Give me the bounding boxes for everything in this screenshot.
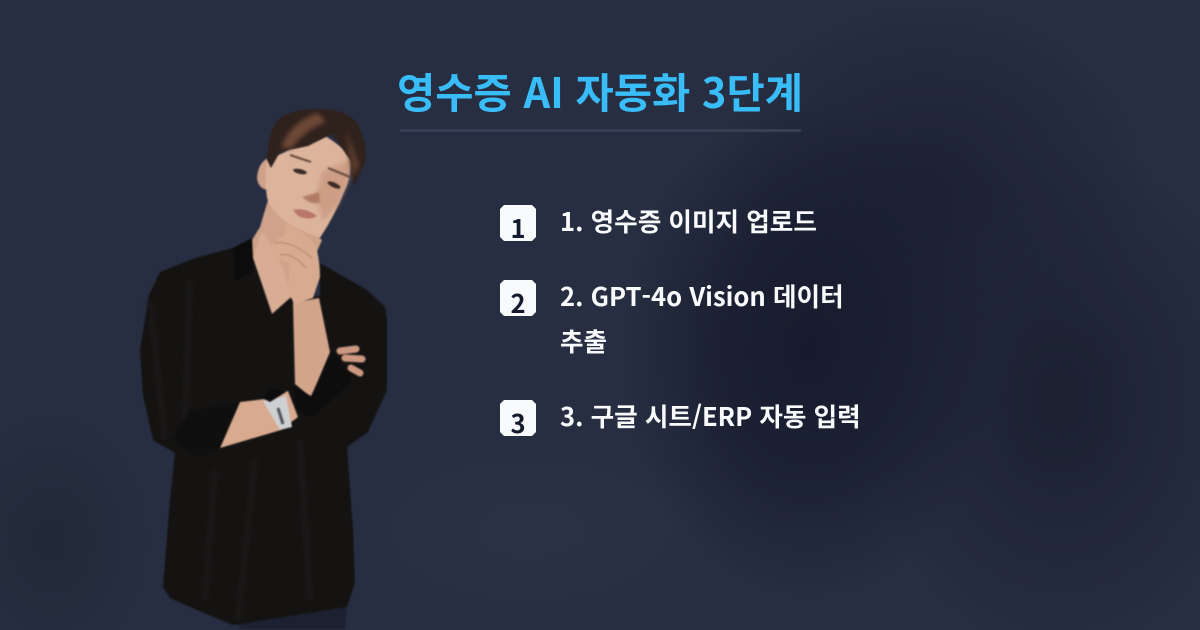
step 2 text: 추출 xyxy=(560,322,607,359)
sleeve cuff xyxy=(306,385,316,398)
hair xyxy=(267,109,366,186)
step 1 text: 1. 영수증 이미지 업로드 xyxy=(560,202,817,239)
collar xyxy=(251,240,252,244)
neck and chest xyxy=(252,200,322,314)
step 3 badge xyxy=(500,400,536,436)
ear xyxy=(257,158,268,190)
face xyxy=(266,133,350,238)
hand on chin xyxy=(270,223,320,304)
step 1 badge: 1 xyxy=(510,209,526,246)
watch xyxy=(263,396,292,430)
step 2 text: 2. GPT-4o Vision 데이터 xyxy=(560,277,844,314)
step 1 badge xyxy=(500,205,536,241)
fingers xyxy=(340,349,362,373)
eyes and brows xyxy=(290,155,350,177)
jeans xyxy=(238,608,346,629)
left sleeve cuff xyxy=(220,402,240,448)
step 2 text xyxy=(560,277,844,359)
title: 영수증 AI 자동화 3단계 xyxy=(397,60,803,120)
step 3 badge: 3 xyxy=(510,404,526,441)
step 2 badge: 2 xyxy=(510,284,526,321)
portrait: man in black shirt xyxy=(140,108,388,629)
step 2 badge xyxy=(500,280,536,316)
step 3 text: 3. 구글 시트/ERP 자동 입력 xyxy=(560,397,861,434)
right forearm xyxy=(293,298,330,397)
shirt xyxy=(140,238,387,625)
title underline xyxy=(400,129,801,132)
mouth xyxy=(293,209,317,218)
left forearm xyxy=(220,391,298,448)
nose shadow xyxy=(302,192,320,203)
